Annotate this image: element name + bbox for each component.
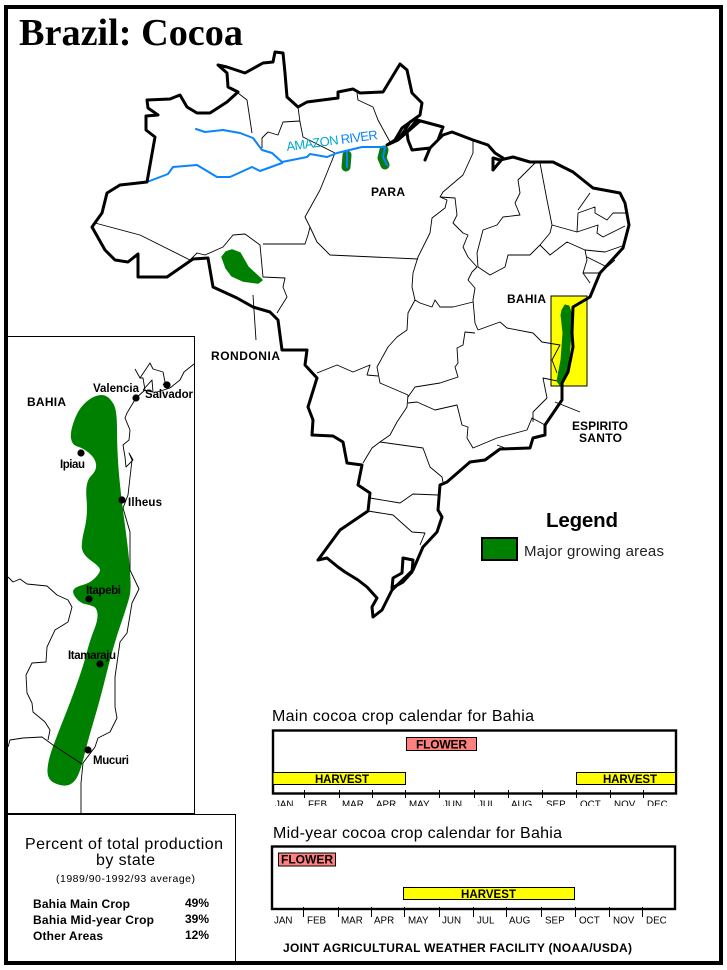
title: Brazil: Cocoa <box>19 12 243 54</box>
month labels: JUL <box>477 916 495 926</box>
highlight box: Bahia inset area <box>551 296 587 386</box>
map of Brazil <box>92 52 629 617</box>
month labels: SEP <box>546 800 566 810</box>
harvest label: HARVEST <box>461 889 516 901</box>
flower bar <box>278 853 336 866</box>
month ticks <box>304 790 644 798</box>
Amazon River <box>147 129 387 182</box>
inset labels: Mucuri <box>93 755 129 767</box>
month ticks <box>304 907 642 917</box>
legend <box>482 509 664 560</box>
state borders <box>95 93 627 545</box>
month labels: JUN <box>443 800 462 810</box>
inset coast and borders <box>8 363 194 813</box>
label: Amazon River: AMAZON RIVER <box>285 127 379 154</box>
legend heading: Legend <box>546 509 618 532</box>
inset labels: Itapebi <box>86 585 121 597</box>
label: Para: PARA <box>371 185 405 199</box>
harvest label: HARVEST <box>603 774 657 786</box>
inset labels <box>27 383 194 767</box>
panel heading: by state <box>96 852 155 869</box>
harvest bar <box>404 888 574 900</box>
inset labels: Salvador <box>145 389 194 401</box>
month labels: AUG <box>511 800 532 810</box>
calendar frame <box>272 846 675 909</box>
month labels: DEC <box>646 916 667 926</box>
month labels: JAN <box>275 800 294 810</box>
Brazil coastline and international border <box>92 52 629 617</box>
month labels: MAR <box>341 916 363 926</box>
month labels: MAY <box>408 916 429 926</box>
month labels: SEP <box>545 916 565 926</box>
harvest bar <box>273 772 406 784</box>
inset labels: Ipiau <box>60 459 85 471</box>
main crop calendar heading: Main cocoa crop calendar for Bahia <box>272 708 534 725</box>
month labels: JAN <box>274 916 293 926</box>
production table: 12% <box>185 928 209 942</box>
calendar frame <box>273 730 676 794</box>
inset bottom rule <box>8 813 195 815</box>
production table: Bahia Main Crop <box>33 897 130 911</box>
harvest bar <box>576 772 676 784</box>
month labels: MAR <box>342 800 364 810</box>
panel: Bahia inset map <box>8 336 195 814</box>
label: Bahia: BAHIA <box>507 292 546 306</box>
panel: percent of production <box>8 814 236 962</box>
panel heading: Percent of total production <box>25 836 223 853</box>
inset city markers <box>77 381 171 754</box>
label: Espirito Santo: ESPIRITO <box>572 419 628 433</box>
month labels: APR <box>376 800 396 810</box>
source credit: JOINT AGRICULTURAL WEATHER FACILITY (NOAA/USDA) <box>283 941 632 955</box>
growing area: Bahia coast <box>557 305 571 387</box>
month labels: NOV <box>614 800 636 810</box>
harvest label: HARVEST <box>315 774 369 786</box>
Rio Grande do Sul lagoon <box>392 558 413 588</box>
label: Espirito Santo: SANTO <box>579 431 622 445</box>
inset labels: BAHIA <box>27 395 66 409</box>
flower label: FLOWER <box>281 852 333 866</box>
label: Rondonia: RONDONIA <box>211 349 280 363</box>
month labels: FEB <box>307 916 327 926</box>
mid-year crop calendar heading: Mid-year cocoa crop calendar for Bahia <box>273 825 562 842</box>
production table: Bahia Mid-year Crop <box>33 913 154 927</box>
inset labels: Ilheus <box>128 497 162 509</box>
month labels <box>274 916 667 926</box>
inset growing area <box>47 395 131 786</box>
production table <box>33 896 209 943</box>
month labels: JUN <box>442 916 461 926</box>
legend label: Major growing areas <box>524 543 664 560</box>
growing area: Rondonia <box>222 250 262 283</box>
panel note: (1989/90-1992/93 average) <box>56 873 195 885</box>
month labels: OCT <box>579 916 600 926</box>
month labels: JUL <box>478 800 496 810</box>
inset labels: Itamaraju <box>68 650 116 662</box>
main crop calendar <box>273 730 676 810</box>
flower bar <box>406 738 476 750</box>
month labels: APR <box>374 916 394 926</box>
production table: 39% <box>185 912 209 926</box>
month labels: MAY <box>409 800 430 810</box>
month labels: NOV <box>613 916 635 926</box>
growing areas: Para <box>346 150 385 167</box>
month labels: AUG <box>509 916 530 926</box>
production table: 49% <box>185 896 209 910</box>
mid-year crop calendar <box>272 846 675 926</box>
production table: Other Areas <box>33 929 103 943</box>
inset labels: Valencia <box>93 383 140 395</box>
panel edge <box>8 814 236 962</box>
flower label: FLOWER <box>416 738 467 752</box>
month labels <box>275 800 668 810</box>
inset frame <box>8 336 194 813</box>
legend swatch <box>482 538 517 560</box>
month labels: OCT <box>580 800 601 810</box>
month labels: DEC <box>647 800 668 810</box>
month labels: FEB <box>308 800 328 810</box>
